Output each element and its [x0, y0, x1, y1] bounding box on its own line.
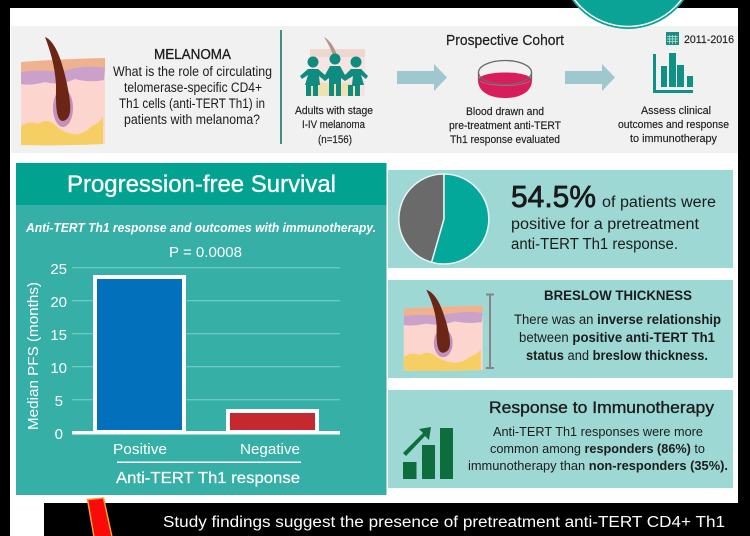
response text [468, 399, 728, 473]
panel: progression-free survival [16, 163, 386, 495]
panel: response to immunotherapy [388, 390, 733, 488]
heading: melanoma question: telomerase-specific CD4+ [124, 80, 262, 95]
text: blood drawn: Th1 response evaluated [450, 134, 560, 146]
bar chart: median PFS: 10 [50, 360, 67, 377]
text: adults with stage I-IV melanoma: (n=156) [318, 134, 352, 146]
breslow text [514, 288, 721, 363]
heading: melanoma question [113, 47, 272, 127]
breslow text: status and breslow thickness. [526, 348, 708, 363]
subtitle: Anti-TERT Th1 response and outcomes with immunotherapy. [25, 221, 376, 235]
icon: rising bars with arrow [403, 427, 453, 479]
stat text: 54.5% [511, 179, 596, 214]
text: assess outcomes: outcomes and response [618, 119, 729, 131]
response text: common among responders (86%) to [490, 442, 705, 456]
icon: bar chart [653, 53, 693, 93]
heading: progression-free survival: Progression-free Survival [67, 171, 336, 198]
stat text: positive for a pretreatment [511, 216, 700, 233]
text: adults with stage I-IV melanoma: I-IV melanoma [302, 119, 366, 131]
pie chart: 54.5% [399, 174, 489, 264]
bar chart: median PFS: 20 [50, 294, 67, 311]
text: adults with stage I-IV melanoma [295, 105, 373, 146]
text: blood drawn [449, 106, 561, 146]
bar: negative [228, 411, 317, 432]
bar chart: median PFS: Anti-TERT Th1 response [116, 470, 300, 487]
heading: melanoma question: What is the role of circulating [113, 64, 272, 79]
heading: melanoma question: MELANOMA [154, 47, 231, 63]
response text: immunotherapy than non-responders (35%). [468, 459, 728, 473]
breslow text: There was an inverse relationship [514, 312, 721, 327]
arrow: patients to blood draw [397, 64, 447, 91]
bar chart: median PFS: Negative [240, 442, 300, 458]
bar chart: median PFS: 15 [50, 327, 67, 344]
bar chart: median PFS: Positive [113, 442, 167, 458]
bar chart: median PFS: 0 [55, 426, 63, 443]
bar chart: median PFS [26, 261, 340, 487]
icon: petri dish [478, 60, 532, 98]
p value: P = 0.0008 [169, 245, 242, 261]
text: assess outcomes [618, 105, 729, 145]
text: assess outcomes: Assess clinical [641, 105, 711, 117]
heading: prospective cohort: Prospective Cohort [446, 33, 564, 49]
panel: positive response rate [388, 170, 733, 268]
bar chart: median PFS: 5 [55, 393, 63, 410]
icon: skin with hair follicle [21, 37, 105, 145]
breslow text: between positive anti-TERT Th1 [519, 330, 715, 345]
text: adults with stage I-IV melanoma: Adults with stage [295, 105, 373, 117]
text: blood drawn: Blood drawn and [466, 106, 544, 118]
icon: calendar and dates [666, 32, 734, 46]
stat text [511, 179, 716, 253]
stat text: anti-TERT Th1 response. [511, 236, 678, 253]
stat text: of patients were [602, 194, 716, 211]
text: blood drawn: pre-treatment anti-TERT [449, 120, 561, 132]
study design strip [11, 0, 738, 153]
teal badge circle [559, 0, 697, 29]
arrow: blood draw to outcomes [565, 64, 615, 91]
breslow text: BRESLOW THICKNESS [544, 288, 692, 303]
conclusion text: Study findings suggest the presence of pretreatment anti-TERT CD4+ Th1 [163, 514, 725, 531]
bar chart: median PFS: 25 [50, 261, 67, 278]
heading: melanoma question: patients with melanoma? [124, 112, 260, 127]
text: assess outcomes: to immunotherapy [630, 133, 717, 145]
icon: calendar and dates: 2011-2016 [684, 34, 734, 46]
bar chart: median PFS: Median PFS (months) [26, 282, 42, 430]
response text: Response to Immunotherapy [489, 399, 715, 417]
panel: breslow thickness [388, 280, 733, 378]
icon: skin with thickness bracket [404, 290, 494, 371]
heading: melanoma question: Th1 cells (anti-TERT Th1) in [119, 96, 265, 111]
response text: Anti-TERT Th1 responses were more [493, 425, 703, 439]
bar: positive [95, 277, 184, 432]
icon: red pencil [88, 498, 112, 536]
icon: patients [300, 37, 368, 96]
conclusion band [44, 498, 750, 536]
